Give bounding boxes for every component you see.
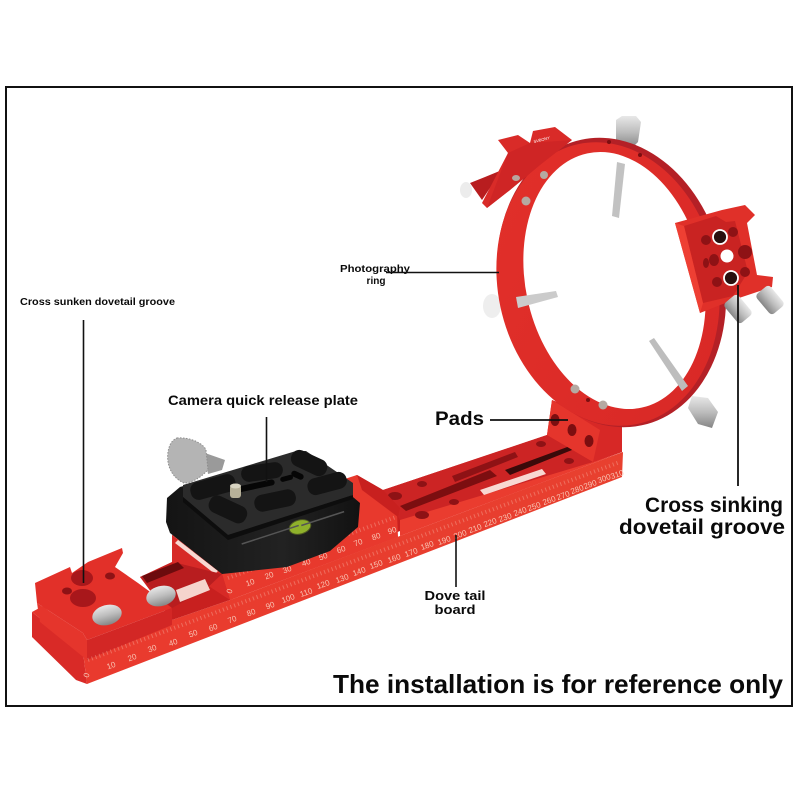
lower ruler scale: 160 [386, 552, 402, 565]
upper ruler scale: 0 [225, 587, 235, 595]
camera quick release plate [166, 438, 360, 574]
photo: dovetail board assembly [32, 400, 625, 684]
callout: cross sinking dovetail groove [619, 285, 785, 539]
lower ruler scale: 60 [207, 622, 219, 633]
callout: dove tail board: board [434, 602, 476, 617]
callout: cross sinking dovetail groove: Cross sinking [645, 494, 783, 517]
upper ruler scale: 50 [317, 551, 329, 562]
upper ruler scale: 60 [335, 544, 347, 555]
upper ruler scale: 70 [352, 537, 364, 548]
knobs behind ring [460, 116, 641, 318]
lower ruler scale: 50 [187, 628, 199, 639]
photo: photography ring [460, 116, 785, 449]
lower ruler scale: 290 [582, 478, 598, 491]
footer note: The installation is for reference only [333, 669, 784, 699]
scale on clamp [241, 511, 344, 545]
upper ruler scale: 30 [281, 564, 293, 575]
lower ruler scale: 310 [609, 468, 625, 481]
lower ruler scale: 80 [245, 607, 257, 618]
upper ruler scale: 10 [244, 577, 256, 588]
knob [168, 438, 225, 483]
lower ruler scale: 10 [105, 660, 117, 671]
lower ruler scale: 230 [497, 511, 513, 524]
callout: photography ring: ring [367, 276, 385, 287]
callout: photography ring: Photography [340, 264, 410, 275]
lower ruler scale: 110 [299, 586, 314, 599]
clamp base [166, 452, 360, 574]
right dovetail mount [675, 205, 773, 313]
lower ruler scale: 180 [419, 539, 435, 552]
dovetail board rail [32, 435, 623, 684]
lower ruler scale: 250 [526, 500, 542, 513]
ring opening [500, 135, 729, 426]
callout: pads: Pads [435, 409, 484, 430]
lower right knob [688, 396, 718, 428]
upper ruler block [172, 475, 400, 600]
pad block [547, 400, 622, 462]
upper ruler scale: 80 [370, 531, 382, 542]
ring small screws [522, 140, 642, 410]
lower ruler scale: 190 [436, 534, 452, 547]
lower ruler scale: 130 [334, 572, 350, 585]
lower ruler scale [82, 462, 625, 679]
frame border [6, 87, 792, 706]
lower ruler scale: 220 [482, 516, 498, 529]
callout: photography ring [340, 264, 499, 287]
left end block [35, 548, 222, 660]
lower ruler scale: 140 [351, 565, 367, 578]
lower ruler scale: 170 [403, 546, 419, 559]
upper ruler scale: 90 [386, 525, 398, 536]
ring inner silver rods [516, 162, 688, 391]
top-left dovetail mount: SVBONY [533, 135, 551, 144]
lower ruler scale: 90 [264, 600, 276, 611]
lower ruler scale: 100 [280, 592, 296, 605]
lower ruler scale: 0 [82, 671, 92, 679]
upper ruler scale [225, 517, 398, 595]
lower ruler scale: 70 [226, 614, 238, 625]
spirit level [288, 517, 312, 537]
callout: dove tail board [424, 535, 486, 617]
ring front face [471, 121, 745, 447]
top-left dovetail mount [470, 127, 572, 208]
lower ruler scale: 280 [569, 483, 585, 496]
lower ruler scale: 200 [452, 528, 468, 541]
callout: cross sunken dovetail groove: Cross sunken dovetail groove [20, 297, 175, 308]
callout: cross sinking dovetail groove: dovetail groove [619, 516, 785, 539]
right dovetail knobs [723, 284, 785, 325]
top plate [183, 451, 353, 535]
lower ruler scale: 270 [555, 489, 571, 502]
callout: camera quick release plate: Camera quick release plate [168, 393, 359, 408]
lower ruler scale: 150 [368, 558, 384, 571]
slots and mounting screw [230, 470, 305, 498]
upper ruler scale: 20 [263, 570, 275, 581]
lower ruler scale: 260 [541, 494, 557, 507]
lower ruler scale: 30 [146, 643, 158, 654]
lower ruler scale: 20 [126, 652, 138, 663]
upper ruler scale: 40 [300, 557, 312, 568]
lower ruler scale: 210 [467, 522, 483, 535]
lower ruler scale: 120 [315, 578, 331, 591]
rubber pads [188, 447, 349, 526]
silver locking screws [90, 582, 178, 629]
callout: dove tail board: Dove tail [424, 588, 486, 603]
lower ruler scale: 240 [512, 505, 528, 518]
callout: pads [435, 409, 568, 430]
rail slots and holes [388, 441, 574, 519]
lower ruler scale: 40 [167, 637, 179, 648]
ring outer ellipse [471, 116, 752, 449]
lower ruler scale: 300 [596, 472, 612, 485]
